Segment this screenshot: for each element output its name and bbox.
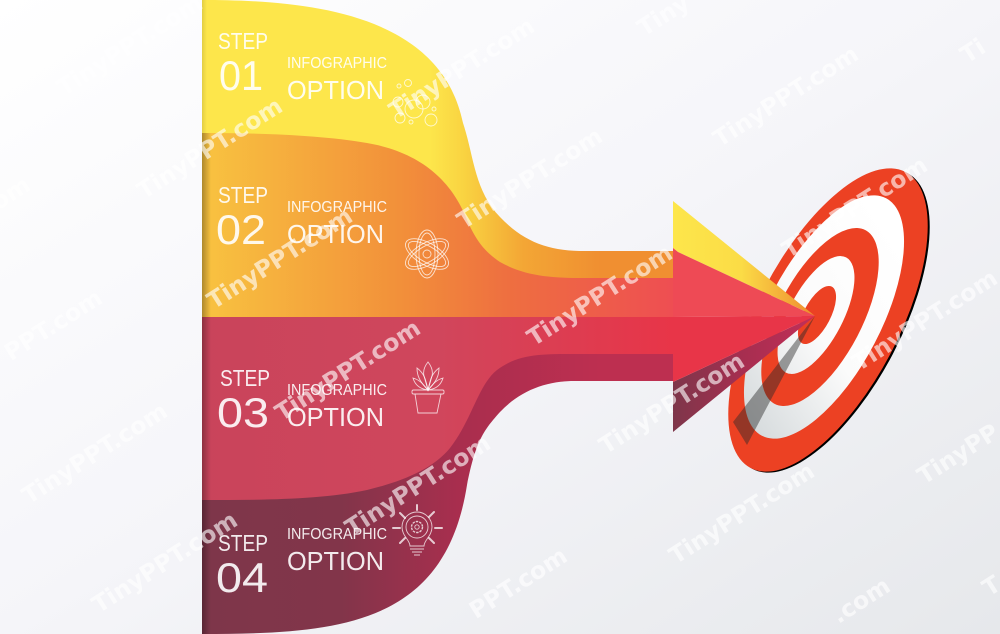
icon: lightbulb with gear <box>393 505 442 555</box>
watermark: TinyPPT.com <box>132 92 287 205</box>
step 4 text <box>216 526 387 601</box>
step 3 text: STEP <box>220 365 270 391</box>
target <box>688 139 970 502</box>
step 1 text <box>218 28 387 105</box>
step 2 text: STEP <box>218 182 268 208</box>
panel: step 3 red band <box>202 317 673 500</box>
step 3 text <box>217 365 387 436</box>
step 3 text: INFOGRAPHIC <box>287 382 387 399</box>
icon: bubbles <box>393 80 437 126</box>
step 1 text: OPTION <box>287 75 384 105</box>
step 2 text <box>216 182 387 253</box>
step 1 text: STEP <box>218 28 268 54</box>
watermark: PPT.com <box>464 541 572 624</box>
step 1 text: 01 <box>219 52 263 99</box>
watermark: TinyPPT.com <box>384 12 539 125</box>
watermark: TinyPPT.com <box>202 202 357 315</box>
watermark: TinyPPT.com <box>522 239 677 352</box>
icon: atom <box>401 230 453 278</box>
arrowhead <box>673 201 815 432</box>
step 4 text: 04 <box>216 554 268 601</box>
step 3 text: 03 <box>217 389 269 436</box>
watermark: TinyPPT.com <box>87 506 242 619</box>
panel: step 1 yellow band <box>202 0 673 278</box>
watermark: TinyPPT.com <box>664 457 819 570</box>
watermark: TinyPPT.com <box>340 429 495 542</box>
step 2 text: INFOGRAPHIC <box>287 199 387 216</box>
left edge shadow <box>202 0 211 634</box>
watermark: PPT.com <box>0 283 107 366</box>
watermark: TinyPPT.com <box>17 397 172 510</box>
watermark: TinyPPT.com <box>452 122 607 235</box>
panel: step 2 orange band <box>202 133 673 317</box>
step 4 text: OPTION <box>287 546 384 576</box>
watermark: TinyPPT.com <box>270 314 425 427</box>
step 1 text: INFOGRAPHIC <box>287 55 387 72</box>
step 4 text: STEP <box>218 530 268 556</box>
step 2 text: OPTION <box>287 219 384 249</box>
step 3 text: OPTION <box>287 402 384 432</box>
watermark: TinyPPT.com <box>847 264 1000 377</box>
watermark: Ti <box>955 32 991 69</box>
watermark: .com <box>827 571 895 629</box>
step 2 text: 02 <box>216 206 266 253</box>
panel: step 4 maroon band <box>202 354 673 634</box>
watermark: TinyPPT.com <box>594 347 749 460</box>
icon: potted plant <box>412 362 444 413</box>
step 4 text: INFOGRAPHIC <box>287 526 387 543</box>
watermark: TinyPPT.com <box>777 151 932 264</box>
watermark: TinyPPT.com <box>708 40 863 153</box>
